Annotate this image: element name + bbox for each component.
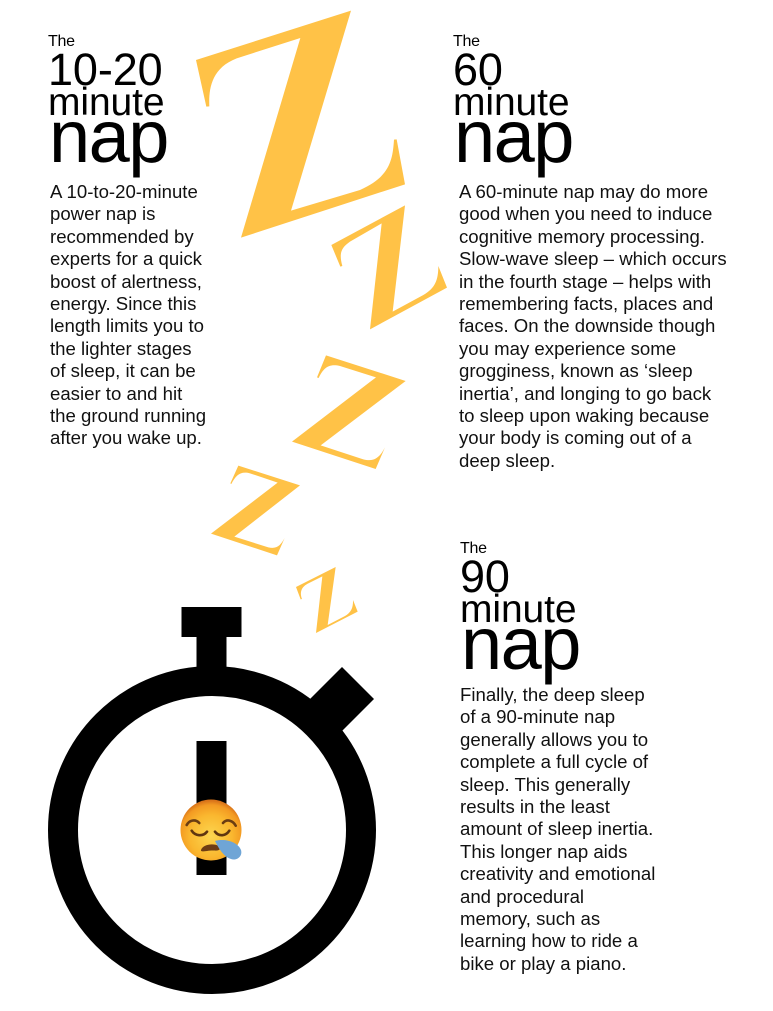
text block: 90 minute description: and procedural — [460, 886, 584, 907]
icon: large letter Z — [196, 11, 405, 238]
text block: 90 minute description: Finally, the deep sleep — [460, 684, 645, 705]
text block: 60 minute description: in the fourth stage – helps with — [459, 271, 711, 292]
text block: 60 minute description: deep sleep. — [459, 450, 555, 471]
text block: 10-20 minute description: energy. Since this — [50, 293, 196, 314]
text block: 10-20 minute description — [50, 181, 206, 448]
text block: 10-20 minute description: boost of alertness, — [50, 271, 202, 292]
text block: 60 minute description: grogginess, known as ‘sleep — [459, 360, 693, 381]
icon: second letter Z — [331, 205, 447, 329]
icon: sleeping face emoji — [180, 800, 242, 860]
heading: 90 minute nap: nap — [461, 602, 580, 685]
text block: 10-20 minute description: recommended by — [50, 226, 194, 247]
heading: 10-20 minute nap: minute — [48, 81, 164, 124]
text block: 10-20 minute description: A 10-to-20-minute — [50, 181, 198, 202]
text block: 90 minute description: generally allows you to — [460, 729, 648, 750]
text block: 60 minute description: faces. On the downside though — [459, 315, 715, 336]
text block: 10-20 minute description: power nap is — [50, 203, 155, 224]
text block: 90 minute description: complete a full cycle of — [460, 751, 648, 772]
text block: 90 minute description: learning how to ride a — [460, 930, 638, 951]
heading: 10-20 minute nap — [48, 33, 168, 178]
stopwatch top button — [182, 607, 242, 672]
icon: fourth letter Z — [211, 466, 300, 555]
text block: 10-20 minute description: after you wake up. — [50, 427, 202, 448]
text block: 10-20 minute description: the ground running — [50, 405, 206, 426]
text block: 60 minute description: remembering facts, places and — [459, 293, 713, 314]
stopwatch side button — [310, 667, 374, 731]
text block: 60 minute description: inertia’, and longing to go back — [459, 383, 711, 404]
text block: 60 minute description: Slow-wave sleep – which occurs — [459, 248, 727, 269]
stopwatch ring — [63, 681, 361, 979]
heading: 90 minute nap — [460, 540, 580, 685]
text block: 60 minute description: good when you need to induce — [459, 203, 712, 224]
text block: 10-20 minute description: length limits you to — [50, 315, 204, 336]
text block: 90 minute description: sleep. This generally — [460, 774, 630, 795]
heading: 60 minute nap: nap — [454, 95, 573, 178]
text block: 60 minute description: to sleep upon waking because — [459, 405, 709, 426]
heading: 90 minute nap: minute — [460, 588, 576, 631]
heading: 10-20 minute nap: nap — [49, 95, 168, 178]
text block: 90 minute description: amount of sleep inertia. — [460, 818, 653, 839]
text block: 60 minute description: you may experience some — [459, 338, 676, 359]
heading: 10-20 minute nap: 10-20 — [48, 44, 163, 95]
panel: 90 minute nap — [460, 540, 655, 974]
heading: 60 minute nap: 60 — [453, 44, 503, 95]
heading: 90 minute nap: The — [460, 540, 487, 557]
text block: 60 minute description: cognitive memory processing. — [459, 226, 705, 247]
text block: 90 minute description: memory, such as — [460, 908, 600, 929]
text block: 90 minute description: creativity and emotional — [460, 863, 655, 884]
text block: 60 minute description — [459, 181, 727, 471]
text block: 10-20 minute description: experts for a quick — [50, 248, 202, 269]
heading: 60 minute nap — [453, 33, 573, 178]
text block: 10-20 minute description: the lighter stages — [50, 338, 192, 359]
text block: 90 minute description — [460, 684, 655, 974]
panel: 60 minute nap — [453, 33, 727, 471]
text block: 60 minute description: your body is coming out of a — [459, 427, 692, 448]
panel: 10-20 minute nap — [48, 33, 206, 448]
text block: 90 minute description: This longer nap aids — [460, 841, 627, 862]
heading: 10-20 minute nap: The — [48, 33, 75, 50]
text block: 60 minute description: A 60-minute nap may do more — [459, 181, 708, 202]
text block: 90 minute description: bike or play a piano. — [460, 953, 626, 974]
heading: 60 minute nap: The — [453, 33, 480, 50]
text block: 90 minute description: results in the least — [460, 796, 610, 817]
heading: 60 minute nap: minute — [453, 81, 569, 124]
icon: third letter Z — [292, 355, 406, 469]
stopwatch hand — [196, 741, 226, 875]
icon: stopwatch — [63, 607, 374, 979]
text block: 10-20 minute description: easier to and hit — [50, 383, 182, 404]
text block: 90 minute description: of a 90-minute nap — [460, 706, 615, 727]
heading: 90 minute nap: 90 — [460, 551, 510, 602]
icon: fifth letter Z — [296, 567, 358, 633]
text block: 10-20 minute description: of sleep, it can be — [50, 360, 196, 381]
